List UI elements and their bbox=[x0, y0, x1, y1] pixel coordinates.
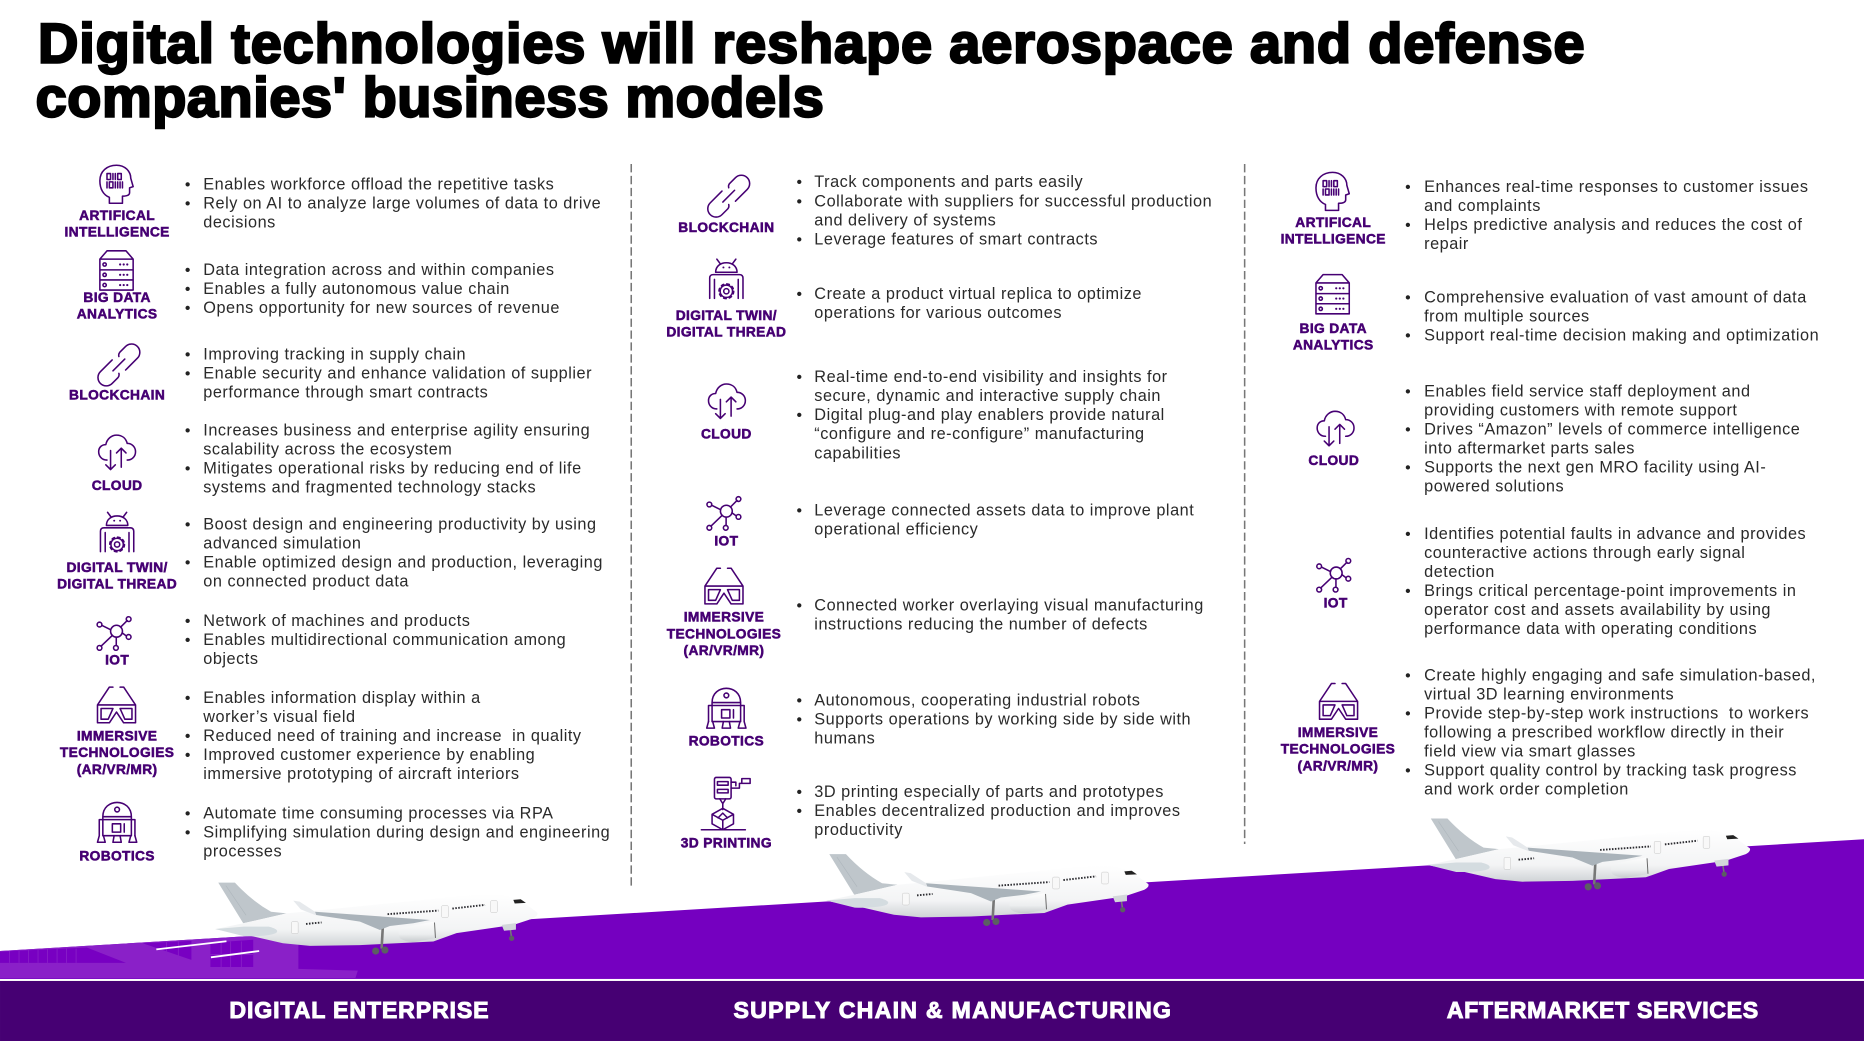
text: digital twin: advanced simulation bbox=[203, 535, 362, 553]
text: digital twin bbox=[796, 285, 1142, 322]
text: immersive: following a prescribed workflow directly in their bbox=[1424, 724, 1784, 742]
label: IoT: IOT bbox=[1324, 595, 1348, 610]
icon: digital twin bbox=[100, 512, 134, 552]
text: robotics: • bbox=[796, 693, 802, 710]
text: big data: Data integration across and within companies bbox=[203, 261, 555, 279]
title bbox=[36, 12, 1585, 129]
text: AI: • bbox=[185, 177, 190, 194]
text: 3D printing: • bbox=[796, 803, 802, 820]
text: AI: repair bbox=[1424, 235, 1469, 253]
text: immersive: Provide step-by-step work instructions to workers bbox=[1424, 705, 1809, 723]
text: cloud: powered solutions bbox=[1424, 478, 1564, 496]
label: digital twin / digital thread: DIGITAL TWIN/ bbox=[66, 560, 168, 575]
text: immersive: Improved customer experience by enabling bbox=[203, 746, 535, 764]
icon: blockchain bbox=[704, 172, 753, 221]
text: robotics bbox=[185, 804, 610, 861]
text: immersive bbox=[185, 689, 582, 783]
label: artificial intelligence: INTELLIGENCE bbox=[1281, 232, 1386, 247]
text: IoT: performance data with operating conditions bbox=[1424, 620, 1757, 638]
text: immersive: virtual 3D learning environments bbox=[1424, 686, 1674, 704]
text: robotics: humans bbox=[814, 730, 875, 748]
airplane: aftermarket bbox=[1427, 818, 1750, 890]
text: big data: from multiple sources bbox=[1424, 308, 1590, 326]
text: cloud bbox=[185, 422, 590, 497]
text: AI: Enhances real-time responses to customer issues bbox=[1424, 178, 1809, 196]
icon: 3D printing bbox=[701, 777, 750, 830]
text: digital twin: on connected product data bbox=[203, 573, 409, 591]
label: cloud: CLOUD bbox=[701, 427, 752, 442]
label: artificial intelligence: INTELLIGENCE bbox=[64, 225, 170, 240]
text: immersive: field view via smart glasses bbox=[1424, 743, 1636, 761]
label: big data analytics: BIG DATA bbox=[83, 290, 151, 305]
text: cloud: Real-time end-to-end visibility and insights for bbox=[814, 368, 1168, 386]
text: immersive: • bbox=[1405, 706, 1411, 723]
text: big data bbox=[185, 261, 560, 317]
label: artificial intelligence: ARTIFICAL bbox=[79, 208, 155, 223]
text: IoT: • bbox=[1405, 583, 1411, 600]
divider bbox=[631, 164, 1245, 887]
text: blockchain: • bbox=[185, 347, 190, 364]
text: immersive bbox=[1405, 667, 1816, 799]
text: blockchain: • bbox=[796, 174, 802, 191]
label: immersive technologies: TECHNOLOGIES bbox=[667, 626, 781, 641]
text: cloud: • bbox=[1405, 460, 1411, 477]
text: immersive bbox=[796, 596, 1204, 633]
panel: supply chain and manufacturing bbox=[666, 172, 1212, 851]
background wedge: purple runway bbox=[0, 839, 1864, 982]
text: blockchain: Collaborate with suppliers for successful production bbox=[814, 192, 1212, 210]
text: 3D printing: • bbox=[796, 784, 802, 801]
text: AI bbox=[1405, 178, 1809, 253]
text: immersive: • bbox=[796, 597, 802, 614]
text: big data bbox=[1405, 289, 1819, 345]
label: immersive technologies: IMMERSIVE bbox=[684, 610, 764, 625]
text: immersive: Support quality control by tracking task progress bbox=[1424, 762, 1797, 780]
icon: big data bbox=[1316, 275, 1349, 314]
icon: artificial intelligence bbox=[1316, 172, 1349, 210]
icon: immersive glasses bbox=[1320, 684, 1358, 719]
text: AI: and complaints bbox=[1424, 197, 1541, 215]
label: robotics: ROBOTICS bbox=[689, 733, 764, 748]
text: big data: Support real-time decision making and optimization bbox=[1424, 327, 1819, 345]
text: big data: Comprehensive evaluation of vast amount of data bbox=[1424, 289, 1807, 307]
text: AI bbox=[185, 176, 601, 232]
icon: robotics bbox=[707, 688, 746, 728]
text: 3D printing: 3D printing especially of parts and prototypes bbox=[814, 783, 1164, 801]
text: immersive: worker’s visual field bbox=[202, 708, 356, 726]
airplane: supply chain bbox=[826, 854, 1149, 926]
label: digital twin / digital thread: DIGITAL TWIN/ bbox=[676, 308, 777, 323]
text: cloud: • bbox=[185, 423, 190, 440]
text: immersive: Reduced need of training and increase in quality bbox=[203, 727, 582, 745]
text: cloud: • bbox=[796, 369, 802, 386]
icon: IoT bbox=[707, 497, 741, 530]
label: immersive technologies: IMMERSIVE bbox=[77, 729, 157, 744]
text: immersive: immersive prototyping of aircraft interiors bbox=[203, 765, 520, 783]
text: robotics: • bbox=[185, 805, 190, 822]
panel: digital enterprise bbox=[57, 165, 610, 864]
text: big data: Enables a fully autonomous value chain bbox=[203, 280, 510, 298]
text: AI: Rely on AI to analyze large volumes of data to drive bbox=[203, 195, 601, 213]
text: IoT: • bbox=[796, 502, 802, 519]
text: AI: • bbox=[1405, 217, 1411, 234]
text: cloud: Increases business and enterprise agility ensuring bbox=[203, 422, 590, 440]
text: IoT: Enables multidirectional communication among bbox=[203, 631, 566, 649]
icon: cloud bbox=[709, 384, 745, 418]
label: immersive technologies: TECHNOLOGIES bbox=[60, 745, 174, 760]
text: immersive: • bbox=[185, 747, 190, 764]
airplane: digital enterprise bbox=[215, 883, 538, 955]
label: digital twin / digital thread: DIGITAL THREAD bbox=[666, 324, 786, 339]
text: cloud: • bbox=[796, 407, 802, 424]
text: robotics: • bbox=[185, 824, 190, 841]
text: immersive: • bbox=[185, 690, 190, 707]
label: IoT: IOT bbox=[105, 653, 129, 668]
text: IoT: Network of machines and products bbox=[203, 612, 470, 630]
text: IoT: counteractive actions through early signal bbox=[1424, 544, 1745, 562]
text: blockchain: Improving tracking in supply chain bbox=[203, 346, 466, 364]
text: robotics bbox=[796, 692, 1191, 748]
label: blockchain: BLOCKCHAIN bbox=[678, 220, 774, 235]
icon: IoT bbox=[1317, 558, 1351, 592]
label: immersive technologies: TECHNOLOGIES bbox=[1281, 742, 1395, 757]
text: immersive: • bbox=[1405, 668, 1411, 685]
icon: big data bbox=[100, 251, 133, 290]
text: cloud: Drives “Amazon” levels of commerce intelligence bbox=[1424, 420, 1800, 438]
icon: artificial intelligence bbox=[100, 165, 133, 203]
text: robotics: • bbox=[796, 712, 802, 729]
text: blockchain: and delivery of systems bbox=[814, 211, 996, 229]
text: cloud: “configure and re-configure” manufacturing bbox=[814, 425, 1145, 443]
text: AI: decisions bbox=[203, 214, 276, 232]
label: big data analytics: ANALYTICS bbox=[77, 307, 157, 322]
label: blockchain: BLOCKCHAIN bbox=[69, 387, 165, 402]
text: robotics: Autonomous, cooperating industrial robots bbox=[814, 692, 1140, 710]
text: digital twin: • bbox=[796, 286, 802, 303]
text: immersive: Enables information display within a bbox=[203, 689, 481, 707]
text: AI: • bbox=[1405, 179, 1411, 196]
text: big data: • bbox=[185, 262, 190, 279]
text: immersive: instructions reducing the number of defects bbox=[814, 615, 1148, 633]
text: blockchain: Enable security and enhance validation of supplier bbox=[203, 365, 592, 383]
footer label: aftermarket services: AFTERMARKET SERVICES bbox=[1447, 997, 1758, 1023]
text: immersive: and work order completion bbox=[1424, 781, 1629, 799]
text: digital twin: operations for various outcomes bbox=[814, 304, 1062, 322]
label: artificial intelligence: ARTIFICAL bbox=[1295, 215, 1371, 230]
text: cloud bbox=[796, 368, 1168, 462]
white separator bbox=[0, 979, 1864, 981]
text: blockchain: • bbox=[796, 231, 802, 248]
icon: immersive glasses bbox=[705, 568, 743, 604]
icon: robotics bbox=[97, 802, 137, 842]
text: immersive: • bbox=[1405, 763, 1411, 780]
text: cloud: scalability across the ecosystem bbox=[203, 441, 452, 459]
text: cloud: • bbox=[185, 461, 190, 478]
text: AI: Helps predictive analysis and reduces the cost of bbox=[1424, 216, 1802, 234]
text: robotics: processes bbox=[203, 843, 282, 861]
text: IoT: • bbox=[185, 632, 190, 649]
text: blockchain: • bbox=[796, 193, 802, 210]
label: IoT: IOT bbox=[714, 534, 739, 549]
label: digital twin / digital thread: DIGITAL THREAD bbox=[57, 576, 177, 591]
text: IoT: operator cost and assets availability by using bbox=[1424, 601, 1771, 619]
text: cloud: providing customers with remote support bbox=[1424, 401, 1737, 419]
text: robotics: Automate time consuming processes via RPA bbox=[203, 804, 554, 822]
footer band bbox=[0, 981, 1864, 1041]
text: immersive: • bbox=[185, 728, 190, 745]
text: cloud: capabilities bbox=[814, 444, 901, 462]
icon: IoT bbox=[97, 617, 131, 650]
text: 3D printing bbox=[796, 783, 1181, 839]
text: big data: • bbox=[185, 281, 190, 298]
text: IoT: Leverage connected assets data to improve plant bbox=[814, 501, 1194, 519]
text: IoT: Identifies potential faults in advance and provides bbox=[1424, 525, 1806, 543]
panel: aftermarket services bbox=[1281, 172, 1819, 799]
title: Digital technologies will reshape aerospace and defense bbox=[38, 12, 1585, 75]
footer label: supply chain and manufacturing: SUPPLY CHAIN & MANUFACTURING bbox=[733, 997, 1171, 1023]
text: immersive: Connected worker overlaying visual manufacturing bbox=[814, 596, 1204, 614]
text: big data: Opens opportunity for new sources of revenue bbox=[203, 299, 560, 317]
text: AI: • bbox=[185, 196, 190, 213]
text: cloud: systems and fragmented technology stacks bbox=[203, 479, 536, 497]
text: digital twin: Boost design and engineering productivity by using bbox=[203, 516, 597, 534]
text: IoT bbox=[1405, 525, 1806, 638]
text: digital twin: Enable optimized design and production, leveraging bbox=[203, 554, 603, 572]
icon: immersive glasses bbox=[97, 687, 136, 723]
text: blockchain: performance through smart contracts bbox=[203, 384, 488, 402]
text: IoT: objects bbox=[203, 650, 258, 668]
text: cloud: • bbox=[1405, 421, 1411, 438]
title: companies' business models bbox=[36, 66, 824, 129]
icon: blockchain bbox=[95, 341, 143, 389]
text: digital twin bbox=[185, 516, 603, 591]
text: IoT bbox=[796, 501, 1194, 538]
text: cloud: Enables field service staff deployment and bbox=[1424, 382, 1751, 400]
text: cloud: secure, dynamic and interactive supply chain bbox=[814, 387, 1161, 405]
airport building silhouette bbox=[0, 933, 358, 978]
text: cloud: Digital plug-and play enablers provide natural bbox=[814, 406, 1165, 424]
text: blockchain: • bbox=[185, 366, 190, 383]
text: robotics: Supports operations by working side by side with bbox=[814, 711, 1191, 729]
text: AI: Enables workforce offload the repetitive tasks bbox=[203, 176, 554, 194]
text: cloud: into aftermarket parts sales bbox=[1424, 440, 1635, 458]
label: big data analytics: BIG DATA bbox=[1300, 321, 1367, 336]
text: immersive: Create highly engaging and safe simulation-based, bbox=[1424, 667, 1816, 685]
text: big data: • bbox=[1405, 290, 1411, 307]
text: blockchain bbox=[185, 346, 592, 402]
text: 3D printing: Enables decentralized production and improves bbox=[814, 802, 1181, 820]
text: blockchain: Leverage features of smart contracts bbox=[814, 230, 1098, 248]
text: IoT: • bbox=[185, 613, 190, 630]
text: IoT bbox=[185, 612, 566, 668]
label: immersive technologies: (AR/VR/MR) bbox=[684, 643, 764, 658]
text: digital twin: Create a product virtual replica to optimize bbox=[814, 285, 1142, 303]
footer label: digital enterprise: DIGITAL ENTERPRISE bbox=[229, 997, 489, 1023]
text: cloud: • bbox=[1405, 383, 1411, 400]
label: big data analytics: ANALYTICS bbox=[1293, 337, 1374, 352]
icon: cloud bbox=[1317, 411, 1354, 446]
text: big data: • bbox=[1405, 328, 1411, 345]
label: cloud: CLOUD bbox=[92, 478, 142, 493]
text: robotics: Simplifying simulation during design and engineering bbox=[203, 823, 610, 841]
text: IoT: • bbox=[1405, 526, 1411, 543]
text: cloud: Supports the next gen MRO facility using AI- bbox=[1424, 459, 1766, 477]
icon: cloud bbox=[99, 435, 136, 470]
icon: digital twin bbox=[710, 259, 743, 299]
label: cloud: CLOUD bbox=[1308, 453, 1359, 468]
text: IoT: detection bbox=[1424, 563, 1495, 581]
text: blockchain: Track components and parts easily bbox=[814, 173, 1084, 191]
text: IoT: operational efficiency bbox=[814, 520, 979, 538]
text: digital twin: • bbox=[185, 555, 190, 572]
label: 3D printing: 3D PRINTING bbox=[681, 836, 772, 851]
text: cloud bbox=[1405, 382, 1800, 496]
text: cloud: Mitigates operational risks by reducing end of life bbox=[203, 460, 582, 478]
text: 3D printing: productivity bbox=[814, 821, 903, 839]
label: immersive technologies: IMMERSIVE bbox=[1298, 725, 1378, 740]
text: IoT: Brings critical percentage-point improvements in bbox=[1424, 582, 1796, 600]
text: digital twin: • bbox=[185, 517, 190, 534]
text: blockchain bbox=[796, 173, 1212, 248]
label: immersive technologies: (AR/VR/MR) bbox=[1298, 758, 1378, 773]
label: immersive technologies: (AR/VR/MR) bbox=[77, 762, 158, 777]
label: robotics: ROBOTICS bbox=[79, 849, 155, 864]
text: big data: • bbox=[185, 300, 190, 317]
